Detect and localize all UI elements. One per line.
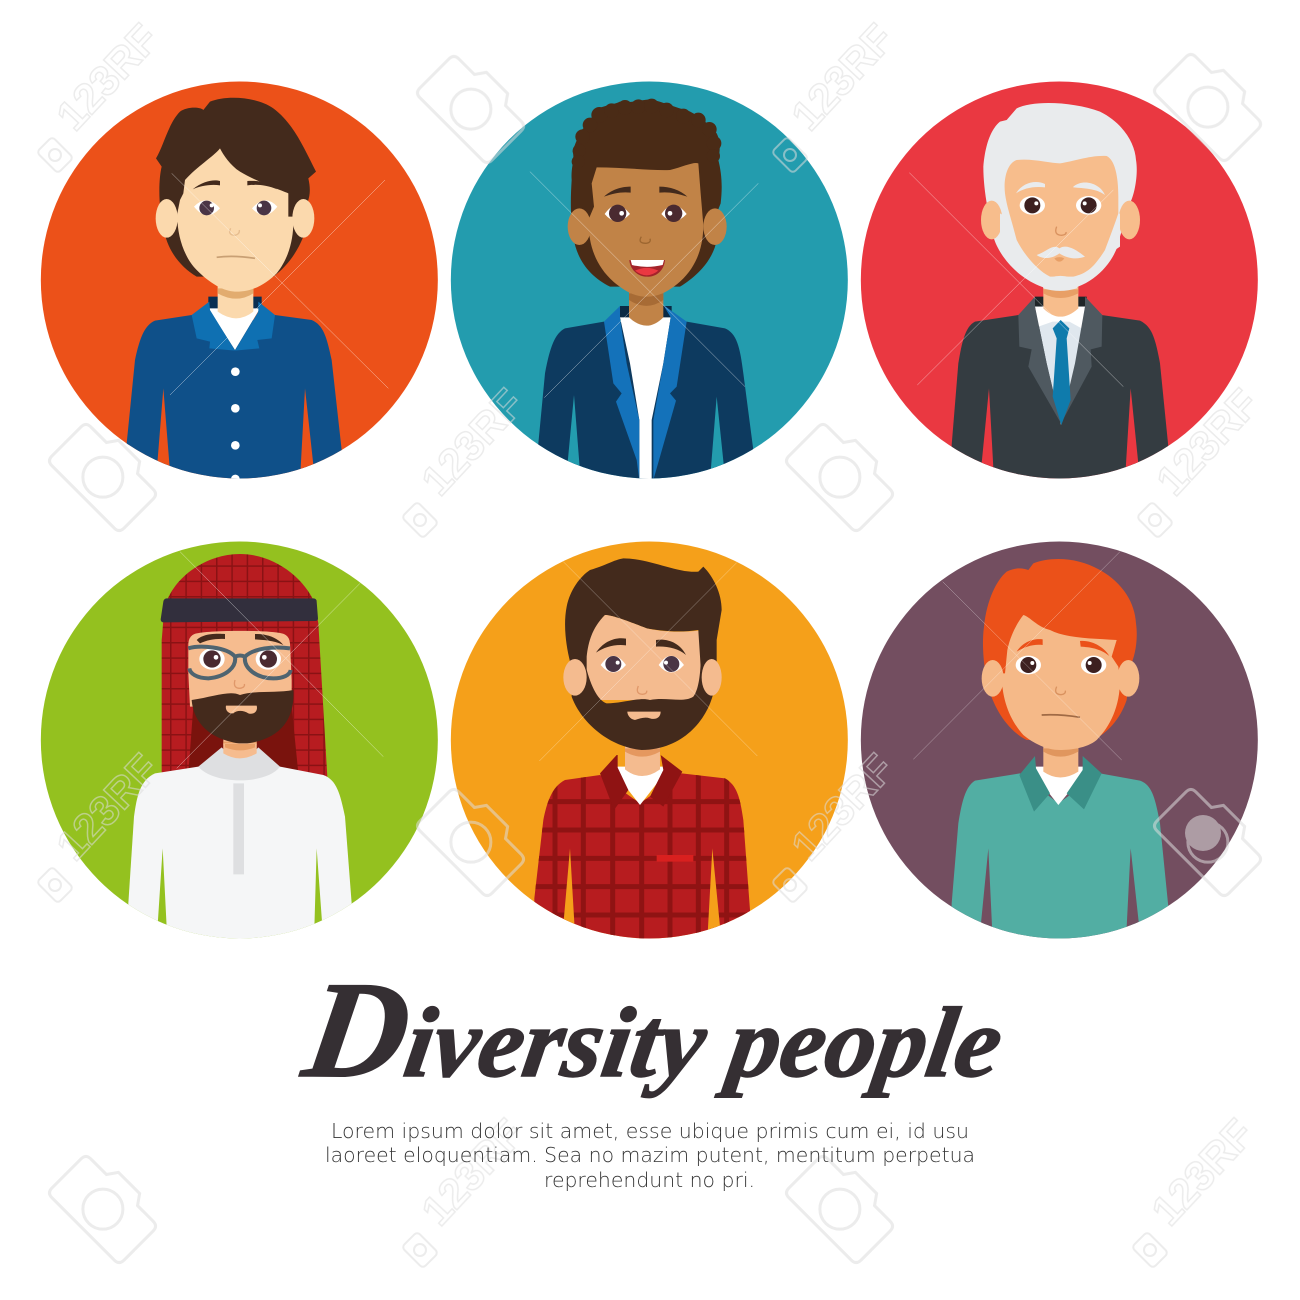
panel: man in keffiyeh on green bbox=[41, 542, 438, 940]
watermarks: 123RF bbox=[1142, 1110, 1263, 1234]
panel: elderly man in suit on red bbox=[861, 81, 1258, 480]
panel: man with dark hair on orange bbox=[41, 81, 438, 483]
body text: Lorem ipsum dolor sit amet, esse ubique primis cum ei, id usu bbox=[331, 1119, 969, 1143]
figure bbox=[128, 552, 383, 940]
watermarks: 123RF bbox=[47, 15, 168, 139]
watermarks: 123RF bbox=[782, 745, 903, 869]
figure bbox=[909, 103, 1168, 480]
watermarks: 123RF bbox=[47, 745, 168, 869]
figure bbox=[913, 552, 1168, 940]
teal circle bbox=[451, 81, 848, 478]
panel: red-haired man on purple bbox=[861, 542, 1258, 940]
amber circle bbox=[451, 542, 848, 938]
panel: bearded man in plaid shirt on amber bbox=[451, 542, 848, 940]
orange circle bbox=[41, 81, 438, 478]
panel: man with curly hair on teal bbox=[451, 81, 848, 480]
title: Diversity people bbox=[293, 954, 1015, 1107]
body text: reprehendunt no pri. bbox=[544, 1168, 755, 1192]
watermarks: 123RF bbox=[412, 1110, 533, 1234]
body text bbox=[325, 1119, 975, 1192]
figure bbox=[530, 99, 758, 480]
figure bbox=[127, 98, 388, 483]
watermarks: 123RF bbox=[1147, 380, 1268, 504]
watermarks: 123RF bbox=[782, 15, 903, 139]
purple circle bbox=[861, 542, 1258, 938]
watermarks: 123RF bbox=[412, 380, 533, 504]
figure bbox=[533, 558, 757, 940]
red circle bbox=[861, 81, 1258, 478]
body text: laoreet eloquentiam. Sea no mazim putent, mentitum perpetua bbox=[325, 1143, 975, 1167]
green circle bbox=[41, 542, 438, 938]
